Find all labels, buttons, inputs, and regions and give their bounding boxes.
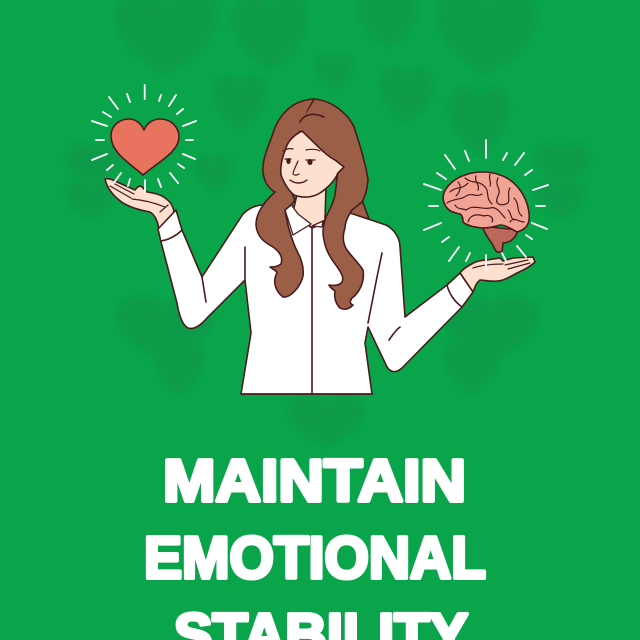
right hand: [460, 257, 535, 292]
illustration: woman balancing heart and brain: [92, 85, 548, 394]
brain folds: [447, 174, 524, 222]
title line 2: EMOTIONAL: [144, 525, 486, 591]
sleeve cuffs and folds: [161, 230, 462, 394]
eyebrows: [283, 149, 320, 160]
back hair wedge: [350, 200, 369, 219]
left hand fingers: [110, 183, 168, 212]
left hand: [105, 179, 176, 230]
heart: [111, 119, 179, 175]
background hearts pattern: [66, 0, 590, 446]
neck: [293, 185, 326, 228]
nose: [293, 161, 299, 175]
right hand fingers: [473, 260, 530, 269]
heart rays: [92, 85, 196, 193]
button placket line: [311, 228, 313, 394]
hair right mass: [300, 99, 368, 309]
collar: [285, 203, 323, 235]
hair parting strand: [300, 114, 324, 122]
brain: [443, 172, 529, 232]
face: [281, 131, 344, 197]
hair left mass: [256, 99, 320, 297]
shirt with sleeves: [158, 205, 473, 394]
title: [144, 448, 486, 640]
smile: [290, 180, 307, 183]
title line 1: MAINTAIN: [163, 448, 466, 514]
hair crown fill: [297, 101, 346, 172]
brain cerebellum and stem: [482, 226, 518, 252]
brain rays: [424, 140, 548, 270]
eyes: [286, 158, 313, 165]
